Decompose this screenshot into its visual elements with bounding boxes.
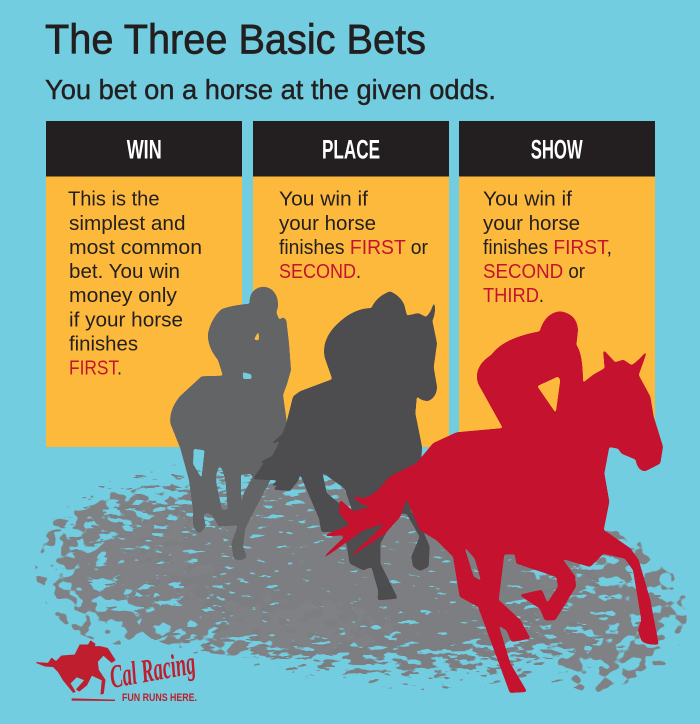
- text: place description: finishes FIRST or: [279, 236, 428, 259]
- panel: show: [459, 121, 655, 447]
- text: win description: finishes: [69, 332, 138, 356]
- text: win description: simplest and: [69, 212, 186, 235]
- logo wordmark: Cal Racing: [107, 645, 198, 696]
- text: win description: most common: [69, 236, 202, 259]
- logo: Cal Racing: [37, 641, 198, 704]
- heading: show: SHOW: [531, 134, 583, 164]
- text: win description: [68, 188, 202, 380]
- text: show description: finishes FIRST,: [483, 236, 612, 259]
- text: win description: This is the: [68, 188, 160, 210]
- text: win description: if your horse: [69, 308, 183, 332]
- title: The Three Basic Bets: [45, 16, 426, 62]
- text: show description: You win if: [483, 188, 572, 210]
- panel: win: [46, 121, 242, 447]
- text: show description: SECOND or: [483, 260, 585, 283]
- logo horse: [37, 641, 115, 701]
- dark horse and jockey: [253, 292, 437, 600]
- panel: place: [253, 121, 449, 447]
- logo tagline: FUN RUNS HERE.: [122, 692, 197, 704]
- text: show description: your horse: [483, 212, 580, 235]
- text: show description: [483, 188, 612, 307]
- text: win description: money only: [69, 284, 178, 307]
- text: win description: bet. You win: [69, 260, 180, 283]
- heading: place: PLACE: [322, 134, 380, 164]
- subtitle: You bet on a horse at the given odds.: [45, 74, 496, 105]
- text: place description: [279, 188, 428, 283]
- gray horse and jockey: [171, 287, 291, 560]
- red horse and jockey: [320, 312, 663, 693]
- text: place description: SECOND.: [279, 260, 361, 283]
- text: place description: You win if: [279, 188, 368, 210]
- text: place description: your horse: [279, 212, 376, 235]
- text: win description: FIRST.: [69, 356, 122, 380]
- dirt splatter: [34, 426, 687, 724]
- heading: win: WIN: [127, 134, 162, 164]
- text: show description: THIRD.: [483, 284, 544, 307]
